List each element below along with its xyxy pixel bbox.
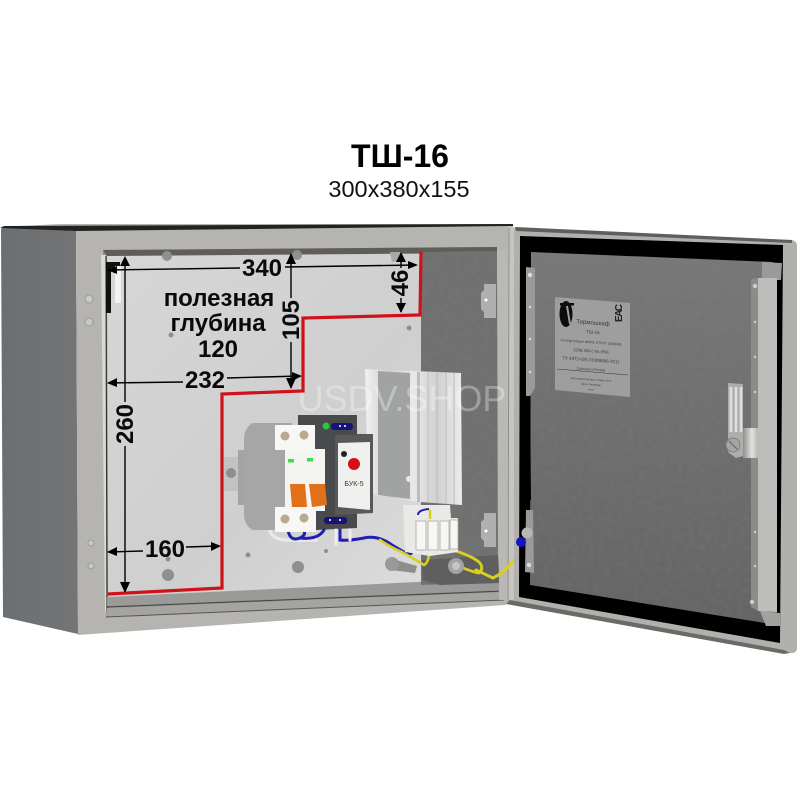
wall brackets — [481, 284, 496, 547]
relay base — [298, 415, 373, 530]
relay name: БУК-5 — [344, 481, 364, 488]
nameplate — [555, 297, 630, 397]
dimension 340 — [107, 255, 418, 282]
top indicator strip — [322, 422, 353, 430]
relay face — [338, 442, 370, 510]
nameplate text: ТШ-16 — [586, 329, 600, 335]
inner left lip — [101, 255, 107, 612]
subtitle: dimensions: 300x380x155 — [328, 176, 470, 202]
breaker bottom terminals — [275, 507, 316, 532]
terminal block — [403, 505, 458, 556]
inner top lip — [103, 247, 497, 256]
relay body — [335, 434, 373, 515]
breaker body — [285, 449, 325, 511]
panel top right gap — [762, 262, 782, 280]
body front frame — [0, 224, 514, 635]
wires — [270, 529, 521, 578]
inner opening shadow — [103, 247, 500, 617]
top right bracket — [390, 252, 404, 262]
dimension 260 — [112, 256, 139, 593]
open door — [506, 227, 797, 654]
dimension 260: 260 — [112, 404, 139, 444]
door frame — [506, 228, 797, 653]
dimension 232: 232 — [185, 367, 225, 394]
heater — [365, 369, 462, 505]
nameplate logo — [560, 301, 574, 327]
body left side — [1, 227, 78, 634]
breaker back — [244, 423, 292, 530]
dimension 46 — [387, 252, 414, 313]
bottom indicator strip — [324, 517, 347, 524]
cabinet body — [0, 224, 518, 635]
black gasket — [519, 236, 783, 643]
usable depth red outline — [108, 252, 421, 594]
indicators — [288, 458, 313, 462]
dimension 232 — [107, 367, 302, 394]
relay logo — [341, 451, 347, 457]
nameplate text: Дата производства и клеймо ОТК — [571, 376, 612, 383]
BUK-5 relay — [322, 422, 373, 524]
nameplate text: Сделано в России — [577, 366, 605, 372]
nameplate text — [561, 318, 621, 394]
dark inner right wall — [421, 251, 498, 585]
nameplate text: 220В 500 с 6А IP66 — [573, 347, 610, 355]
nameplate text: Санкт-Петербург — [581, 382, 601, 387]
right frame edge — [497, 248, 510, 600]
back panel — [107, 252, 421, 598]
usable depth label — [164, 285, 274, 363]
nameplate text: Термошкаф — [576, 319, 610, 328]
back panel holes — [162, 250, 412, 581]
dimension 340: 340 — [242, 255, 282, 282]
frame screws — [85, 295, 94, 569]
textured inner panel — [530, 252, 777, 625]
black clip — [106, 262, 121, 313]
grounding bolts — [385, 557, 464, 574]
DIN rail and clamp — [224, 450, 262, 505]
toggles — [290, 484, 327, 507]
usable depth label: глубина — [170, 310, 266, 337]
door latch — [726, 383, 758, 458]
dimension 105: 105 — [278, 300, 305, 340]
EAC mark: ЕАС — [614, 304, 625, 322]
dimension 46: 46 — [387, 270, 414, 296]
circuit breaker — [244, 423, 327, 532]
nameplate text: ТУ 4372-026-31009686-2011 — [562, 355, 620, 365]
breaker top terminals — [275, 425, 315, 450]
usable depth label: 120 — [198, 336, 238, 363]
nameplate text: Соответствует ФКРЛ, 67СКТ 1819049 — [561, 338, 621, 347]
watermark: USDV.SHOP — [298, 378, 506, 419]
usable depth label: полезная — [164, 285, 274, 312]
dimension 105 — [278, 253, 305, 389]
door ground stud — [516, 528, 532, 547]
right door strip — [750, 278, 780, 626]
left door strip — [525, 267, 535, 573]
title: ТШ-16 — [351, 138, 449, 174]
nameplate text: www — [588, 388, 594, 392]
relay knob — [348, 458, 360, 470]
dimension 160 — [107, 536, 221, 563]
inner bottom sill — [106, 578, 504, 617]
dimension 160: 160 — [145, 536, 185, 563]
